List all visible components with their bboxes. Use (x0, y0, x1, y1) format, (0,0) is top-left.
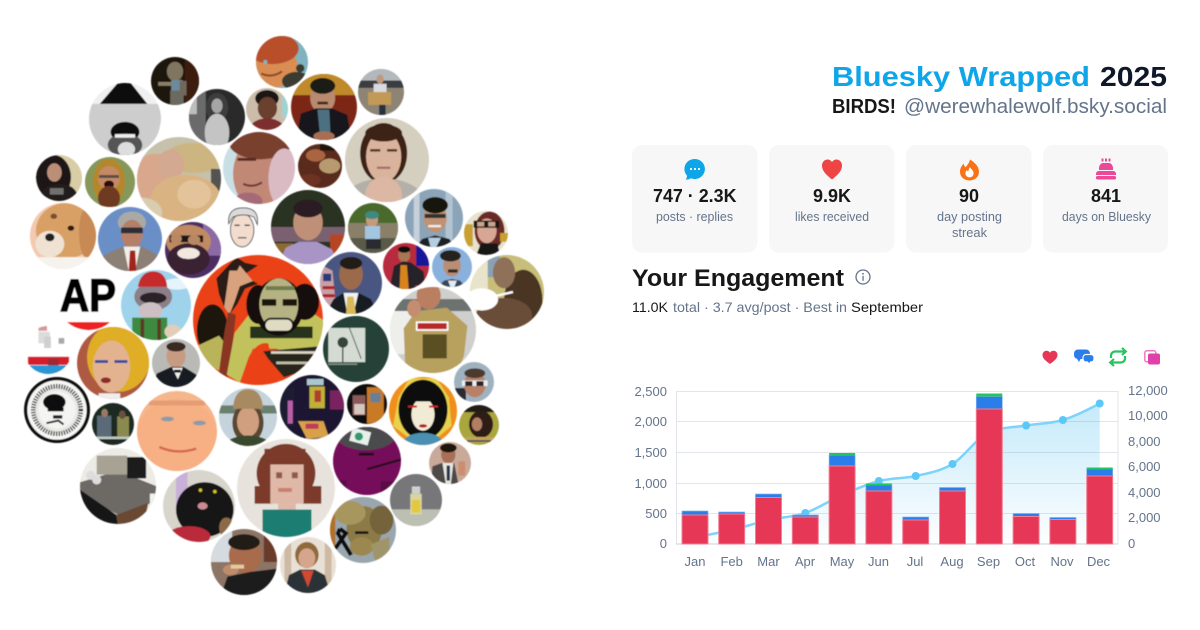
right axis labels: 8,000 (1128, 434, 1161, 449)
stat value: 841 (1091, 186, 1121, 206)
left axis labels: 2,000 (634, 414, 667, 429)
stat label: likes received (795, 209, 869, 224)
display name and handle: @werewhalewolf.bsky.social (904, 96, 1167, 118)
month labels: Dec (1087, 554, 1111, 569)
cumulative line points (801, 400, 1104, 517)
avatar: woman with dark hair and red top (246, 88, 288, 131)
right axis labels: 10,000 (1128, 408, 1168, 423)
avatar: orange phone booth (346, 383, 388, 425)
stat label: streak (952, 225, 987, 240)
cumulative line (695, 404, 1100, 537)
avatar: smiling man eating (210, 528, 278, 596)
avatar: woman reading in yellow (458, 404, 500, 446)
left axis labels (634, 384, 667, 551)
avatar: grimacing man with hand on cheek (222, 131, 296, 205)
month labels (685, 554, 1111, 569)
avatar bubble cluster (24, 33, 544, 595)
right axis labels: 2,000 (1128, 510, 1161, 525)
engagement summary: September (851, 299, 923, 315)
avatar: man in lavender shirt at night (270, 189, 346, 265)
title: Bluesky Wrapped (832, 61, 1090, 92)
avatar: man in plaid suit against blue (97, 206, 163, 272)
icon: replies bubbles (1074, 350, 1094, 364)
cumulative area (695, 404, 1100, 544)
avatar: smiling man with glasses (404, 188, 464, 248)
month labels: Nov (1050, 554, 1074, 569)
icon: flame (960, 160, 979, 180)
avatar: young woman with brown hair (344, 118, 430, 202)
engagement summary (632, 299, 923, 315)
avatar: blonde cartoon heroine (76, 326, 150, 400)
avatar: woman with big glasses and red hair (463, 210, 509, 256)
avatar: groom in tuxedo (152, 338, 200, 388)
panel: day posting streak (906, 145, 1032, 252)
avatar: man pointing finger in suit (428, 442, 472, 485)
avatar: protester with cardboard sign (357, 68, 405, 116)
icon: speech bubble (684, 159, 705, 180)
stat value: 9.9K (813, 186, 851, 206)
month labels: Aug (940, 554, 964, 569)
avatar: golden retriever dog (30, 202, 97, 269)
avatar: congressman with flag (319, 251, 383, 315)
stat label: days on Bluesky (1062, 209, 1151, 224)
avatar: Pete in front of blue sky (431, 246, 473, 288)
avatar: smiling man with glasses and beard (164, 221, 222, 279)
icon: info (856, 270, 870, 284)
title: 2025 (1100, 61, 1167, 92)
avatar: arcade cabinet in a dark room (279, 374, 345, 440)
month labels: Apr (795, 554, 816, 569)
heading: Your Engagement: Your Engagement (632, 265, 844, 292)
avatar: goth woman with orange border (388, 376, 458, 446)
gridlines (676, 391, 1118, 544)
avatar: man with mustache in red booth (290, 73, 358, 141)
month labels: Mar (757, 554, 780, 569)
right axis labels (1128, 383, 1168, 551)
title (832, 61, 1167, 92)
month labels: Oct (1015, 554, 1035, 569)
right axis labels: 0 (1128, 536, 1135, 551)
avatar: smiling round face close-up (136, 390, 218, 472)
avatar: dark green album cover (322, 315, 390, 383)
chart legend icons (1042, 348, 1160, 366)
right axis labels: 12,000 (1128, 383, 1168, 398)
combo chart: monthly engagement bars with cumulative line (634, 383, 1168, 569)
icon: quotes squares (1145, 351, 1160, 364)
bars: likes (682, 409, 1113, 544)
engagement summary: total · 3.7 avg/post · Best in (673, 299, 847, 315)
icon: likes heart (1042, 351, 1058, 364)
avatar: long haired man with bright flare (470, 254, 545, 330)
stat value: 747 · 2.3K (653, 186, 736, 206)
avatar: line drawing of a man's head (228, 206, 259, 248)
avatar: dark haired woman (35, 154, 82, 202)
month labels: Jun (868, 554, 889, 569)
icon: birthday cake (1096, 158, 1116, 180)
avatar: woman in tan cap (218, 388, 278, 447)
month labels: Jul (907, 554, 923, 569)
avatar: pixelated red and white ship (27, 326, 70, 375)
avatar: bottle of lemon drink on grey (389, 473, 443, 526)
avatar: large red comic zombie (192, 254, 324, 386)
right axis labels: 4,000 (1128, 485, 1161, 500)
right axis labels: 6,000 (1128, 459, 1161, 474)
left axis labels: 0 (660, 536, 667, 551)
left axis labels: 2,500 (634, 384, 667, 399)
avatar: woman senator in dark blazer (280, 536, 336, 594)
month labels: May (830, 554, 855, 569)
avatar: small illustrated figure on dark background (150, 56, 200, 106)
avatar: bronze bust with mourning ribbon (329, 496, 396, 564)
left axis labels: 500 (645, 506, 667, 521)
bars: reposts green caps (829, 394, 1113, 485)
avatar: AP logo: AP (60, 270, 116, 321)
stat label: day posting (937, 209, 1002, 224)
bars: replies stacks (682, 396, 1113, 520)
avatar: black triangle over a grey bearded figure (88, 82, 162, 156)
avatar: raccoon with red beanie (120, 270, 192, 341)
avatar: Raise Hell Praise Dale patch (23, 376, 91, 444)
panel: likes received (769, 145, 894, 252)
left axis labels: 1,500 (634, 445, 667, 460)
stat value: 90 (959, 186, 979, 206)
avatar: blonde woman hugging cat (136, 136, 222, 222)
stat label: posts · replies (656, 209, 733, 224)
avatar: cross-stitched woman (236, 438, 336, 538)
display name and handle: BIRDS! (832, 96, 896, 118)
avatar: purple hooded character with green badge (332, 426, 402, 496)
avatar: black shaggy dog (162, 470, 236, 543)
avatar: hiker woman in green forest (347, 202, 399, 254)
left axis labels: 1,000 (634, 476, 667, 491)
month labels: Sep (977, 554, 1000, 569)
avatar: man in white sunglasses (454, 362, 494, 402)
avatar: race driver in Miller suit (390, 286, 476, 374)
avatar: Snowlark film still (91, 402, 135, 446)
avatar: brown sepia cat pile (297, 143, 343, 189)
engagement summary: 11.0K (632, 299, 669, 315)
icon: heart (822, 160, 842, 180)
icon: reposts arrows (1110, 348, 1126, 366)
stat label (937, 209, 1002, 240)
avatar: man in orange shirt on red background (382, 242, 430, 290)
month labels: Feb (720, 554, 743, 569)
avatar: bearded cartoon man (84, 156, 136, 208)
avatar: man with orange knit hat (255, 35, 309, 89)
month labels: Jan (685, 554, 705, 569)
panel: posts and replies (632, 145, 758, 252)
panel: days on Bluesky (1043, 145, 1168, 252)
avatar: tube amplifier on a table (79, 448, 157, 525)
avatar: black and white woman (188, 88, 246, 146)
